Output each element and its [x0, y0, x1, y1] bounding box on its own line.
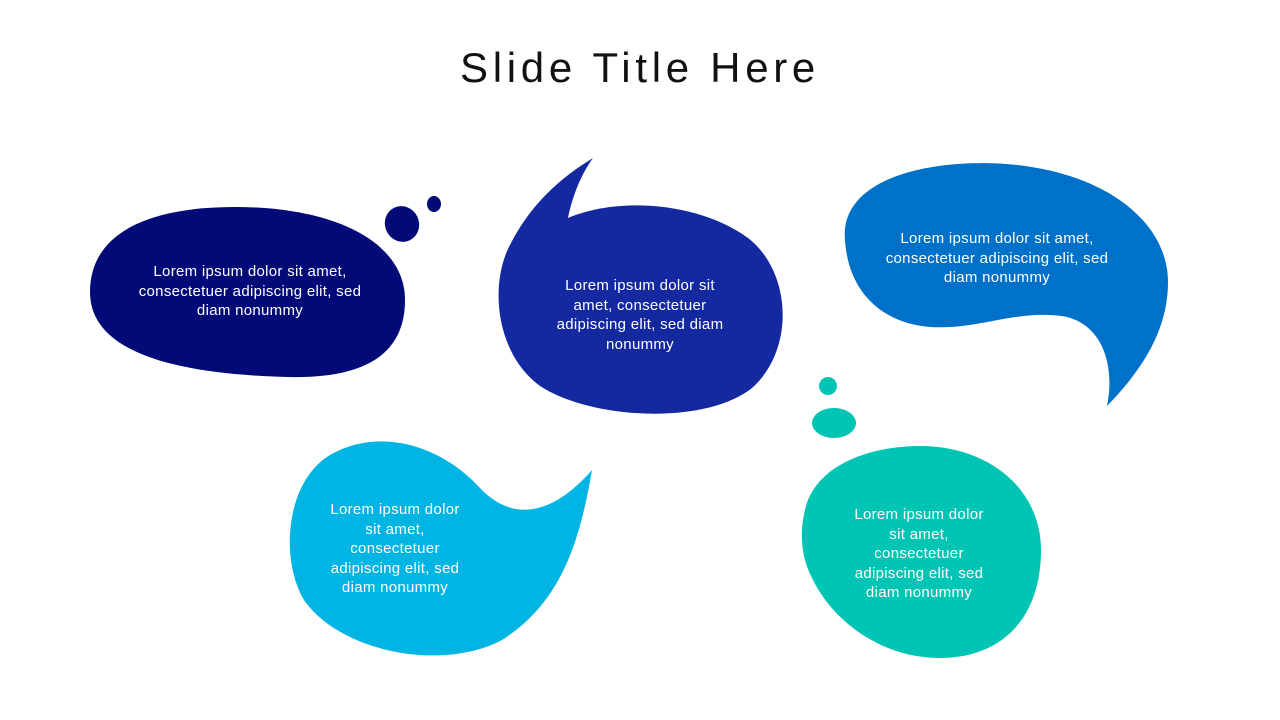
text: bubble 1: diam nonummy — [197, 302, 303, 319]
text: bubble 5: diam nonummy — [866, 584, 972, 601]
text: bubble 4: Lorem ipsum dolor — [330, 501, 460, 518]
text: bubble 2: nonummy — [606, 336, 674, 352]
text: bubble 4: consectetuer — [350, 540, 440, 557]
text: bubble 2 — [557, 277, 723, 352]
bubble 5: teal thought bubble — [802, 377, 1041, 658]
text: bubble 1: consectetuer adipiscing elit, sed — [139, 282, 361, 300]
text: bubble 1 — [139, 263, 361, 319]
bubble 2: royal blue speech bubble — [499, 158, 783, 414]
text: bubble 1: Lorem ipsum dolor sit amet, — [153, 263, 347, 280]
text: bubble 2: adipiscing elit, sed diam — [557, 316, 723, 333]
bubble 1: dark navy thought bubble — [90, 196, 441, 377]
text: bubble 4: sit amet, — [365, 520, 425, 538]
text: bubble 5: adipiscing elit, sed — [855, 564, 983, 582]
text: bubble 2: amet, consectetuer — [574, 296, 706, 314]
text: bubble 3: Lorem ipsum dolor sit amet, — [900, 230, 1094, 247]
bubble 4: light blue speech bubble — [290, 441, 592, 655]
title: Slide Title Here — [460, 44, 820, 91]
text: bubble 5 — [854, 506, 984, 601]
text: bubble 4 — [330, 501, 460, 596]
text: bubble 4: diam nonummy — [342, 579, 448, 596]
text: bubble 3: diam nonummy — [944, 269, 1050, 286]
text: bubble 5: sit amet, — [889, 526, 949, 542]
text: bubble 3 — [886, 230, 1108, 286]
text: bubble 5: consectetuer — [874, 545, 964, 562]
text: bubble 5: Lorem ipsum dolor — [854, 506, 984, 523]
text: bubble 4: adipiscing elit, sed — [331, 560, 459, 576]
text: bubble 2: Lorem ipsum dolor sit — [565, 277, 715, 294]
bubble 3: medium blue speech bubble — [845, 163, 1168, 406]
text: bubble 3: consectetuer adipiscing elit, sed — [886, 250, 1108, 266]
